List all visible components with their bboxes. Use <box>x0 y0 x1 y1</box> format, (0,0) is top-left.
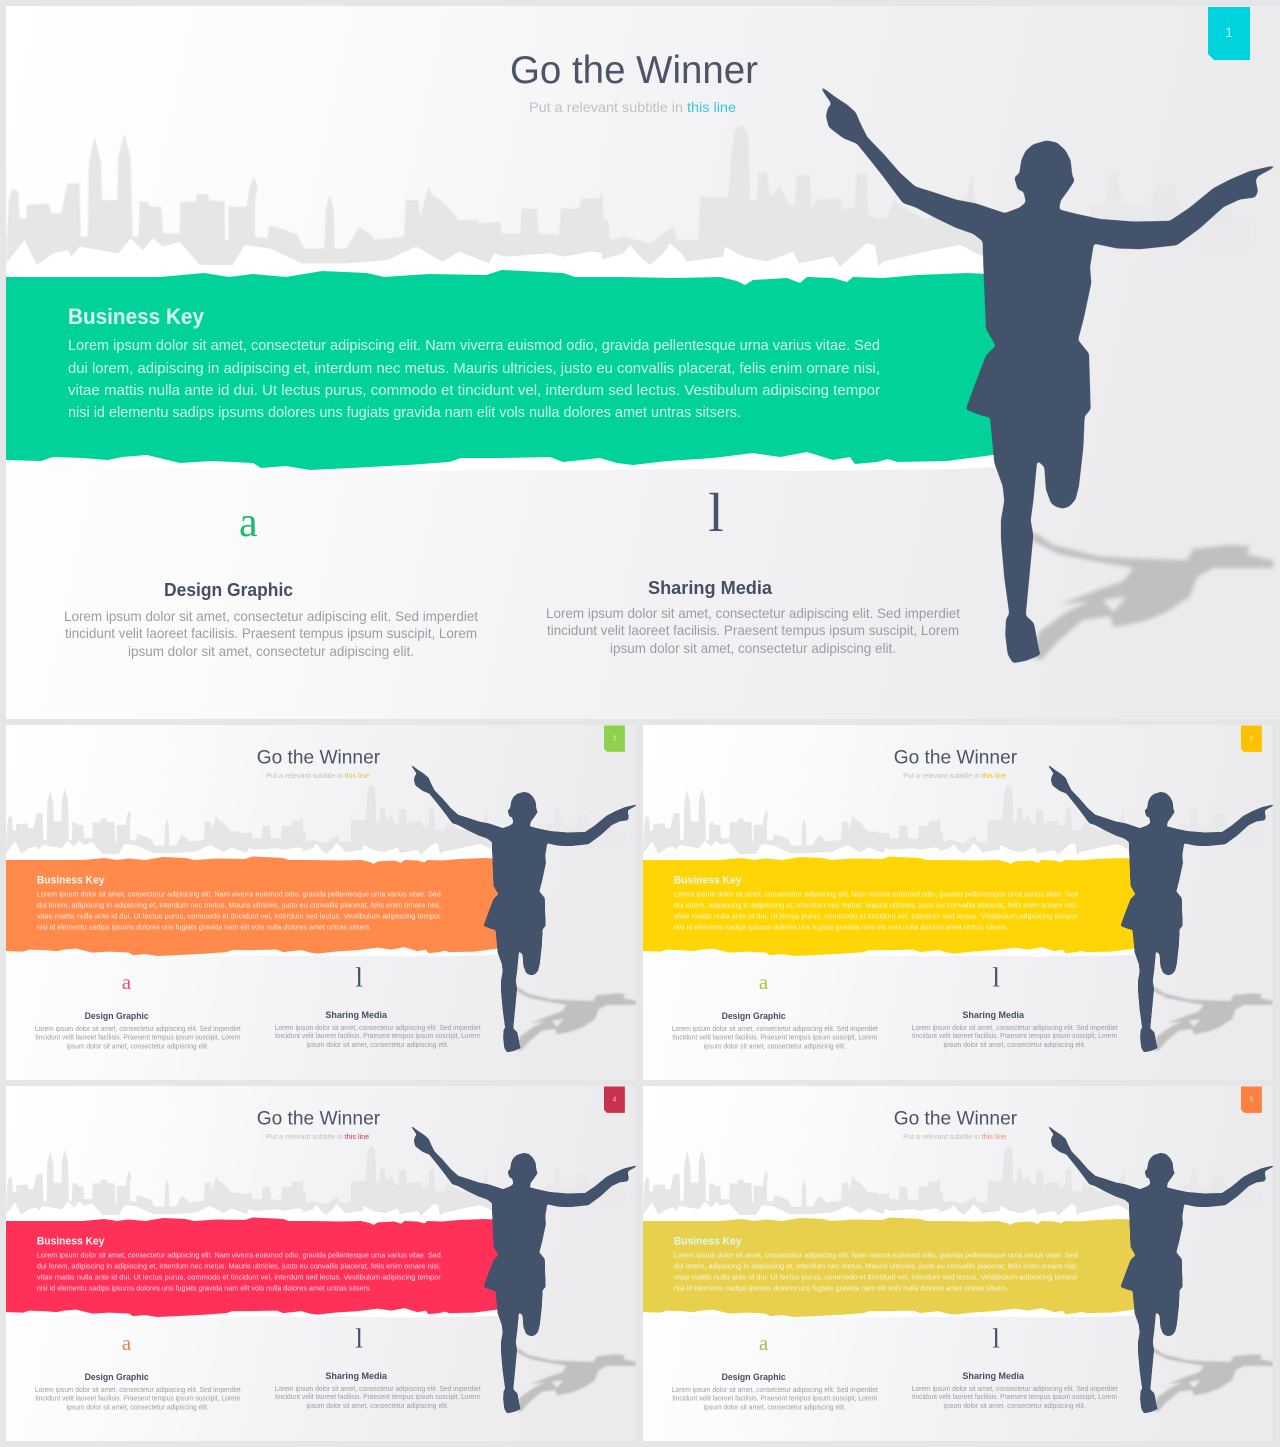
subtitle: Put a relevant subtitle in <box>903 773 980 780</box>
page number tag: 1 <box>1225 24 1233 40</box>
icon glyph: media: l <box>992 962 1000 992</box>
business key body text: nisi id elementu sadips ipsums dolores uns fugiats gravida nam elit vols nulla dolores amet untras sitsers. <box>37 1284 372 1293</box>
mustard torn band <box>643 1217 1142 1317</box>
subtitle: Put a relevant subtitle in <box>266 1134 343 1141</box>
heading: design graphic: Design Graphic <box>164 580 293 600</box>
subtitle <box>530 102 736 112</box>
heading: design graphic: Design Graphic <box>722 1372 786 1382</box>
page number tag: 5 <box>1249 1096 1253 1103</box>
text: design graphic <box>35 1387 241 1412</box>
business key body text: nisi id elementu sadips ipsums dolores uns fugiats gravida nam elit vols nulla dolores amet untras sitsers. <box>674 923 1009 932</box>
text: sharing media <box>275 1386 481 1410</box>
business key body text <box>68 338 880 421</box>
slide background <box>643 725 1209 1080</box>
runner silhouette <box>1048 1126 1275 1413</box>
page number tag: 4 <box>612 1096 616 1103</box>
city skyline <box>643 1145 1262 1232</box>
runner silhouette <box>821 87 1276 662</box>
title: Go the Winner <box>257 746 381 768</box>
business key heading: Business Key <box>68 304 205 329</box>
text: sharing media <box>912 1386 1118 1410</box>
page number tag <box>1241 725 1262 752</box>
runner shadow <box>515 1348 636 1412</box>
page number tag: 3 <box>1249 735 1253 742</box>
text: sharing media: ipsum dolor sit amet, consectetur adipiscing elit. <box>306 1042 449 1049</box>
subtitle <box>266 772 369 778</box>
text: design graphic: Lorem ipsum dolor sit amet, consectetur adipiscing elit. Sed imperdiet <box>35 1026 241 1033</box>
icon glyph: design: a <box>239 500 258 546</box>
text: design graphic: ipsum dolor sit amet, consectetur adipiscing elit. <box>67 1405 209 1412</box>
text: design graphic: Lorem ipsum dolor sit amet, consectetur adipiscing elit. Sed imperdiet <box>672 1387 878 1394</box>
yellow torn band <box>643 856 1142 956</box>
business key body text: vitae mattis nulla ante id dui. Ut lectus purus, commodo et tincidunt vel, interdum sed lectus. Vestibulum adipiscing tempor <box>37 912 441 921</box>
subtitle: Put a relevant subtitle in <box>266 773 343 780</box>
city skyline <box>6 784 492 854</box>
page number tag <box>1241 1086 1262 1113</box>
text: sharing media: ipsum dolor sit amet, consectetur adipiscing elit. <box>943 1403 1086 1410</box>
text: sharing media: tincidunt velit laoreet facilisis. Praesent tempus ipsum suscipit, Lorem <box>275 1394 480 1401</box>
subtitle: this line <box>345 773 369 780</box>
text: design graphic: tincidunt velit laoreet facilisis. Praesent tempus ipsum suscipit, Lorem <box>672 1396 877 1403</box>
subtitle: this line <box>982 773 1006 780</box>
panel: slide 4 red-pink <box>6 1086 638 1441</box>
icon glyph: media: l <box>355 962 363 992</box>
business key body text: dui lorem, adipiscing in adipiscing et, interdum nec metus. Mauris ultricies, justo eu convallis placerat, felis enim ornare nisi, <box>68 361 880 377</box>
text: sharing media <box>546 605 960 656</box>
text: design graphic <box>672 1387 878 1412</box>
city skyline <box>6 1145 625 1232</box>
text: sharing media: tincidunt velit laoreet facilisis. Praesent tempus ipsum suscipit, Lorem <box>547 622 959 638</box>
icon glyph: media: l <box>355 1323 363 1353</box>
page number tag <box>1208 7 1250 60</box>
business key body text <box>37 889 441 932</box>
icon glyph: design: a <box>122 1331 131 1355</box>
business key heading: Business Key <box>37 1235 105 1247</box>
text: sharing media: Lorem ipsum dolor sit amet, consectetur adipiscing elit. Sed imperdiet <box>275 1025 481 1032</box>
text: sharing media: Lorem ipsum dolor sit amet, consectetur adipiscing elit. Sed imperdiet <box>912 1025 1118 1032</box>
business key body text <box>674 889 1078 932</box>
business key body text: Lorem ipsum dolor sit amet, consectetur adipiscing elit. Nam viverra euismod odio, gravida pellentesque urna varius vitae. Sed <box>674 889 1078 898</box>
text: sharing media: ipsum dolor sit amet, consectetur adipiscing elit. <box>306 1403 449 1410</box>
text: sharing media: Lorem ipsum dolor sit amet, consectetur adipiscing elit. Sed imperdiet <box>912 1386 1118 1393</box>
subtitle: this line <box>345 1134 369 1141</box>
icon glyph: design: a <box>122 970 131 994</box>
business key body text: dui lorem, adipiscing in adipiscing et, interdum nec metus. Mauris ultricies, justo eu convallis placerat, felis enim ornare nisi, <box>674 1262 1078 1271</box>
torn paper bottom edge <box>6 1307 505 1318</box>
subtitle: this line <box>687 99 736 115</box>
runner shadow <box>1152 1348 1273 1412</box>
page number tag: 2 <box>612 735 616 742</box>
runner silhouette <box>1048 765 1275 1052</box>
runner shadow <box>515 987 636 1051</box>
page number tag <box>604 1086 625 1113</box>
torn paper top edge <box>6 1202 500 1232</box>
icon glyph: design: a <box>759 1331 768 1355</box>
icon glyph: media: l <box>992 1323 1000 1353</box>
business key body text: dui lorem, adipiscing in adipiscing et, interdum nec metus. Mauris ultricies, justo eu convallis placerat, felis enim ornare nisi, <box>37 1262 441 1271</box>
title: Go the Winner <box>894 746 1018 768</box>
runner shadow <box>1030 532 1273 660</box>
text: design graphic: Lorem ipsum dolor sit amet, consectetur adipiscing elit. Sed imperdiet <box>672 1026 878 1033</box>
text: sharing media: Lorem ipsum dolor sit amet, consectetur adipiscing elit. Sed imperdiet <box>546 605 960 621</box>
heading: design graphic: Design Graphic <box>85 1011 149 1021</box>
heading: sharing media: Sharing Media <box>962 1010 1025 1020</box>
subtitle: Put a relevant subtitle in <box>903 1134 980 1141</box>
text: design graphic <box>35 1026 241 1051</box>
business key body text: Lorem ipsum dolor sit amet, consectetur adipiscing elit. Nam viverra euismod odio, gravida pellentesque urna varius vitae. Sed <box>37 889 441 898</box>
business key body text: Lorem ipsum dolor sit amet, consectetur adipiscing elit. Nam viverra euismod odio, gravida pellentesque urna varius vitae. Sed <box>37 1250 441 1259</box>
icon glyph: media: l <box>708 482 724 543</box>
business key body text: dui lorem, adipiscing in adipiscing et, interdum nec metus. Mauris ultricies, justo eu convallis placerat, felis enim ornare nisi, <box>37 901 441 910</box>
business key heading: Business Key <box>37 874 105 886</box>
subtitle: Put a relevant subtitle in <box>529 99 683 115</box>
torn paper top edge <box>643 1202 1137 1232</box>
text: sharing media: ipsum dolor sit amet, consectetur adipiscing elit. <box>943 1042 1086 1049</box>
text: design graphic: ipsum dolor sit amet, consectetur adipiscing elit. <box>704 1044 846 1051</box>
slide background <box>6 6 1151 719</box>
torn paper bottom edge <box>643 1307 1142 1318</box>
business key body text: nisi id elementu sadips ipsums dolores uns fugiats gravida nam elit vols nulla dolores amet untras sitsers. <box>68 405 741 421</box>
text: design graphic: tincidunt velit laoreet facilisis. Praesent tempus ipsum suscipit, Lorem <box>65 625 477 641</box>
page number tag <box>604 725 625 752</box>
torn paper top edge <box>6 238 984 285</box>
text: sharing media: tincidunt velit laoreet facilisis. Praesent tempus ipsum suscipit, Lorem <box>912 1033 1117 1040</box>
business key heading: Business Key <box>674 1235 742 1247</box>
text: design graphic: tincidunt velit laoreet facilisis. Praesent tempus ipsum suscipit, Lorem <box>35 1035 240 1042</box>
business key body text <box>37 1250 441 1293</box>
text: sharing media <box>275 1025 481 1049</box>
text: design graphic: ipsum dolor sit amet, consectetur adipiscing elit. <box>128 643 414 659</box>
panel: slide 1 teal-green <box>6 6 1280 719</box>
business key body text: vitae mattis nulla ante id dui. Ut lectus purus, commodo et tincidunt vel, interdum sed lectus. Vestibulum adipiscing tempor <box>674 912 1078 921</box>
torn paper top edge <box>643 841 1137 871</box>
text: design graphic: ipsum dolor sit amet, consectetur adipiscing elit. <box>704 1405 846 1412</box>
text: design graphic: Lorem ipsum dolor sit amet, consectetur adipiscing elit. Sed imperdiet <box>64 608 478 624</box>
business key heading: Business Key <box>674 874 742 886</box>
slide background <box>6 725 572 1080</box>
business key body text: nisi id elementu sadips ipsums dolores uns fugiats gravida nam elit vols nulla dolores amet untras sitsers. <box>37 923 372 932</box>
torn paper bottom edge <box>425 452 996 471</box>
torn paper bottom edge <box>213 947 498 956</box>
heading: design graphic: Design Graphic <box>85 1372 149 1382</box>
panel: slide 3 yellow <box>643 725 1275 1080</box>
icon glyph: design: a <box>759 970 768 994</box>
business key body text: vitae mattis nulla ante id dui. Ut lectus purus, commodo et tincidunt vel, interdum sed lectus. Vestibulum adipiscing tempor <box>37 1273 441 1282</box>
city skyline <box>6 126 983 277</box>
business key body text <box>674 1250 1078 1293</box>
runner silhouette <box>411 1126 638 1413</box>
panel: slide 2 orange <box>6 725 638 1080</box>
heading: sharing media: Sharing Media <box>648 578 773 598</box>
text: design graphic: tincidunt velit laoreet facilisis. Praesent tempus ipsum suscipit, Lorem <box>672 1035 877 1042</box>
title: Go the Winner <box>894 1107 1018 1129</box>
heading: sharing media: Sharing Media <box>325 1010 388 1020</box>
slide background <box>643 1086 1273 1441</box>
text: sharing media: Lorem ipsum dolor sit amet, consectetur adipiscing elit. Sed imperdiet <box>275 1386 481 1393</box>
text: design graphic: Lorem ipsum dolor sit amet, consectetur adipiscing elit. Sed imperdiet <box>35 1387 241 1394</box>
slide background <box>6 1086 636 1441</box>
torn paper top edge <box>6 840 492 864</box>
green torn band <box>6 270 1010 470</box>
heading: design graphic: Design Graphic <box>722 1011 786 1021</box>
heading: sharing media: Sharing Media <box>325 1371 388 1381</box>
text: design graphic: ipsum dolor sit amet, consectetur adipiscing elit. <box>67 1044 209 1051</box>
business key body text: Lorem ipsum dolor sit amet, consectetur adipiscing elit. Nam viverra euismod odio, gravida pellentesque urna varius vitae. Sed <box>674 1250 1078 1259</box>
heading: sharing media: Sharing Media <box>962 1371 1025 1381</box>
text: design graphic <box>672 1026 878 1051</box>
pink torn band <box>6 1217 505 1317</box>
business key body text: vitae mattis nulla ante id dui. Ut lectus purus, commodo et tincidunt vel, interdum sed lectus. Vestibulum adipiscing tempor <box>68 383 880 399</box>
text: sharing media <box>912 1025 1118 1049</box>
business key body text: Lorem ipsum dolor sit amet, consectetur adipiscing elit. Nam viverra euismod odio, gravida pellentesque urna varius vitae. Sed <box>68 338 880 354</box>
text: sharing media: tincidunt velit laoreet facilisis. Praesent tempus ipsum suscipit, Lorem <box>912 1394 1117 1401</box>
business key body text: nisi id elementu sadips ipsums dolores uns fugiats gravida nam elit vols nulla dolores amet untras sitsers. <box>674 1284 1009 1293</box>
text: design graphic <box>64 608 478 659</box>
subtitle: this line <box>982 1134 1006 1141</box>
orange torn band <box>6 856 505 956</box>
panel: slide 5 mustard <box>643 1086 1275 1441</box>
text: sharing media: ipsum dolor sit amet, consectetur adipiscing elit. <box>610 640 896 656</box>
text: sharing media: tincidunt velit laoreet facilisis. Praesent tempus ipsum suscipit, Lorem <box>275 1033 480 1040</box>
business key body text: dui lorem, adipiscing in adipiscing et, interdum nec metus. Mauris ultricies, justo eu convallis placerat, felis enim ornare nisi, <box>674 901 1078 910</box>
runner silhouette <box>411 765 638 1052</box>
title: Go the Winner <box>257 1107 381 1129</box>
torn paper bottom edge <box>643 946 1142 957</box>
title: Go the Winner <box>510 49 758 92</box>
runner shadow <box>1152 987 1273 1051</box>
business key body text: vitae mattis nulla ante id dui. Ut lectus purus, commodo et tincidunt vel, interdum sed lectus. Vestibulum adipiscing tempor <box>674 1273 1078 1282</box>
city skyline <box>643 784 1262 871</box>
text: design graphic: tincidunt velit laoreet facilisis. Praesent tempus ipsum suscipit, Lorem <box>35 1396 240 1403</box>
